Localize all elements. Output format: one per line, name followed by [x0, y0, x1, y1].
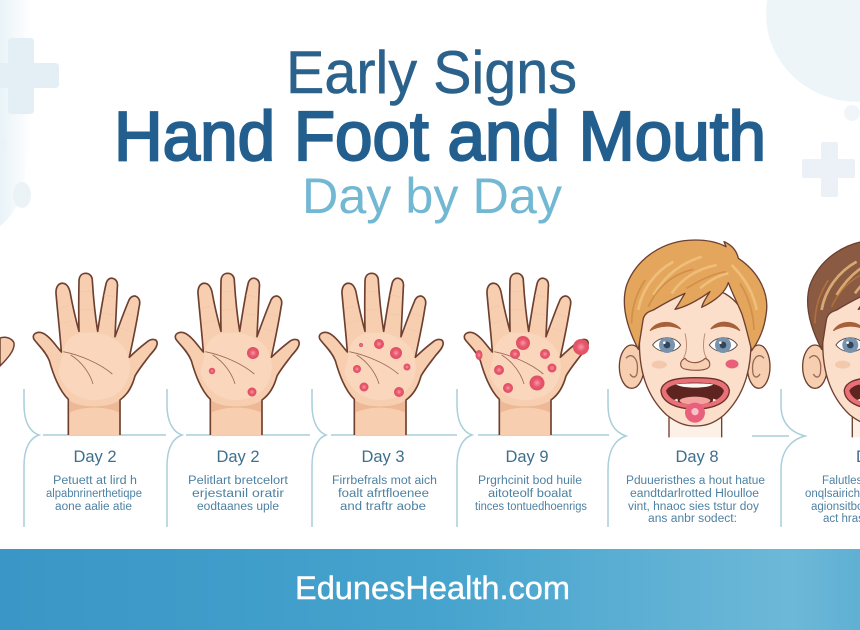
icon: hand with few spots — [175, 273, 299, 435]
description: aitoteolf boalat — [488, 488, 573, 500]
step: day 8 child face — [619, 240, 770, 525]
description: Pelitlart bretcelort — [188, 475, 289, 487]
description — [626, 475, 765, 525]
description — [805, 475, 860, 525]
decor: right small circle — [844, 105, 860, 121]
description: eandtdarlrotted Hloulloe — [630, 488, 759, 500]
icon: hand with more spots — [319, 273, 443, 435]
description — [475, 475, 587, 513]
day label: Day 2 — [73, 448, 117, 466]
description — [332, 475, 437, 513]
description: Prgrhcinit bod huile — [478, 475, 582, 487]
description — [46, 475, 142, 513]
description: Pduueristhes a hout hatue — [626, 475, 765, 487]
decor: left cross — [0, 38, 59, 114]
description: tinces tontuedhoenrigs — [475, 501, 587, 513]
day label: Day 8 — [675, 448, 719, 466]
day label: Day 2 — [216, 448, 260, 466]
day label: Day 9 — [505, 448, 549, 466]
title — [114, 39, 766, 224]
timeline connector lines — [24, 389, 805, 527]
description: foalt afrtfloenee — [338, 488, 429, 500]
decor: right cross — [802, 142, 855, 197]
icon: blond child face — [619, 240, 770, 437]
description: Petuett at lird h — [53, 475, 137, 487]
description: aone aalie atie — [55, 501, 132, 513]
spots — [476, 336, 589, 393]
description: alpabnrinerthetiqpe — [46, 488, 142, 500]
step: day 3 more spots — [319, 273, 443, 513]
description: eodtaanes uple — [197, 501, 279, 513]
description: erjestanil oratir — [192, 488, 284, 500]
step: day 9 many spots — [464, 273, 589, 513]
description — [188, 475, 289, 513]
spots — [353, 339, 410, 397]
title line 3: Day by Day — [302, 168, 562, 224]
step: last day child face — [803, 240, 860, 525]
description: and traftr aobe — [340, 501, 426, 513]
step: day 2 few spots — [175, 273, 299, 513]
description: Firrbefrals mot aich — [332, 475, 437, 487]
footer banner — [0, 549, 860, 630]
partial hand at left edge — [0, 337, 14, 366]
decor: top right blob — [766, 0, 860, 102]
decor: left pale blob — [0, 0, 32, 226]
description: vint, hnaoc sies tstur doy — [628, 501, 759, 513]
day label: Day 3 — [361, 448, 405, 466]
icon: clear hand — [33, 273, 157, 435]
step: day 2 clear hand — [33, 273, 157, 513]
spots — [209, 347, 259, 396]
description: ans anbr sodect: — [648, 513, 737, 525]
website text: EdunesHealth.com — [295, 570, 570, 606]
icon: hand with many spots — [464, 273, 588, 435]
decor: left small shapes — [0, 138, 31, 208]
title line 2: Hand Foot and Mouth — [114, 97, 766, 175]
icon: brown haired child face — [803, 240, 860, 437]
title line 1: Early Signs — [286, 39, 577, 106]
